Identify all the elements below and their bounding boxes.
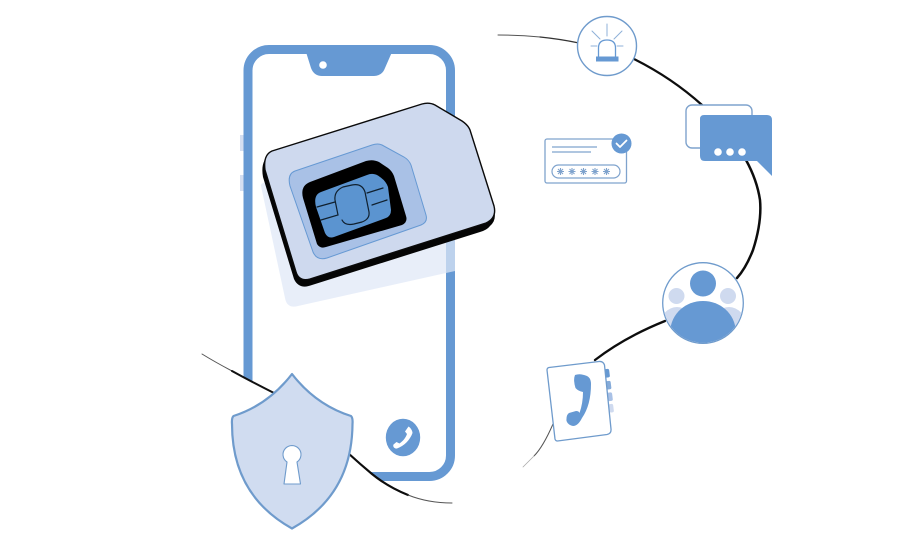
chat dots xyxy=(714,148,746,156)
shield xyxy=(232,374,353,528)
call button xyxy=(386,419,420,456)
phone xyxy=(236,50,450,495)
icon: contacts group xyxy=(662,262,744,344)
front chat bubble xyxy=(700,115,772,176)
password asterisks xyxy=(557,168,610,175)
keyhole xyxy=(283,446,301,484)
SIM soft shadow xyxy=(261,165,455,307)
icon: password card xyxy=(545,134,632,183)
main contact body xyxy=(670,301,736,343)
icon: chat bubbles xyxy=(686,105,772,176)
SIM card xyxy=(261,103,495,307)
SIM contact area xyxy=(289,144,426,259)
phone side buttons xyxy=(240,135,244,191)
connector curve behind shield xyxy=(202,354,452,503)
main contact head xyxy=(690,270,716,296)
illustration: SIM security xyxy=(202,16,772,530)
phone body xyxy=(248,50,450,476)
icon: phone book xyxy=(547,361,614,441)
phone book handset xyxy=(566,374,591,426)
SIM black edge xyxy=(262,106,495,287)
side contacts xyxy=(668,288,684,304)
connector curve: right arc xyxy=(498,35,760,467)
verified badge xyxy=(612,134,632,154)
SIM face xyxy=(265,103,495,280)
phone camera xyxy=(319,61,327,69)
SIM chip lines xyxy=(317,185,387,224)
phone notch xyxy=(306,52,392,76)
back chat bubble xyxy=(686,105,752,148)
phone cut-away below the curve xyxy=(236,373,390,495)
icon: alarm beacon xyxy=(578,16,636,76)
SIM chip xyxy=(315,174,391,238)
SIM chip frame xyxy=(302,160,406,248)
phone book cover xyxy=(547,361,611,441)
phone book tabs xyxy=(604,369,614,413)
